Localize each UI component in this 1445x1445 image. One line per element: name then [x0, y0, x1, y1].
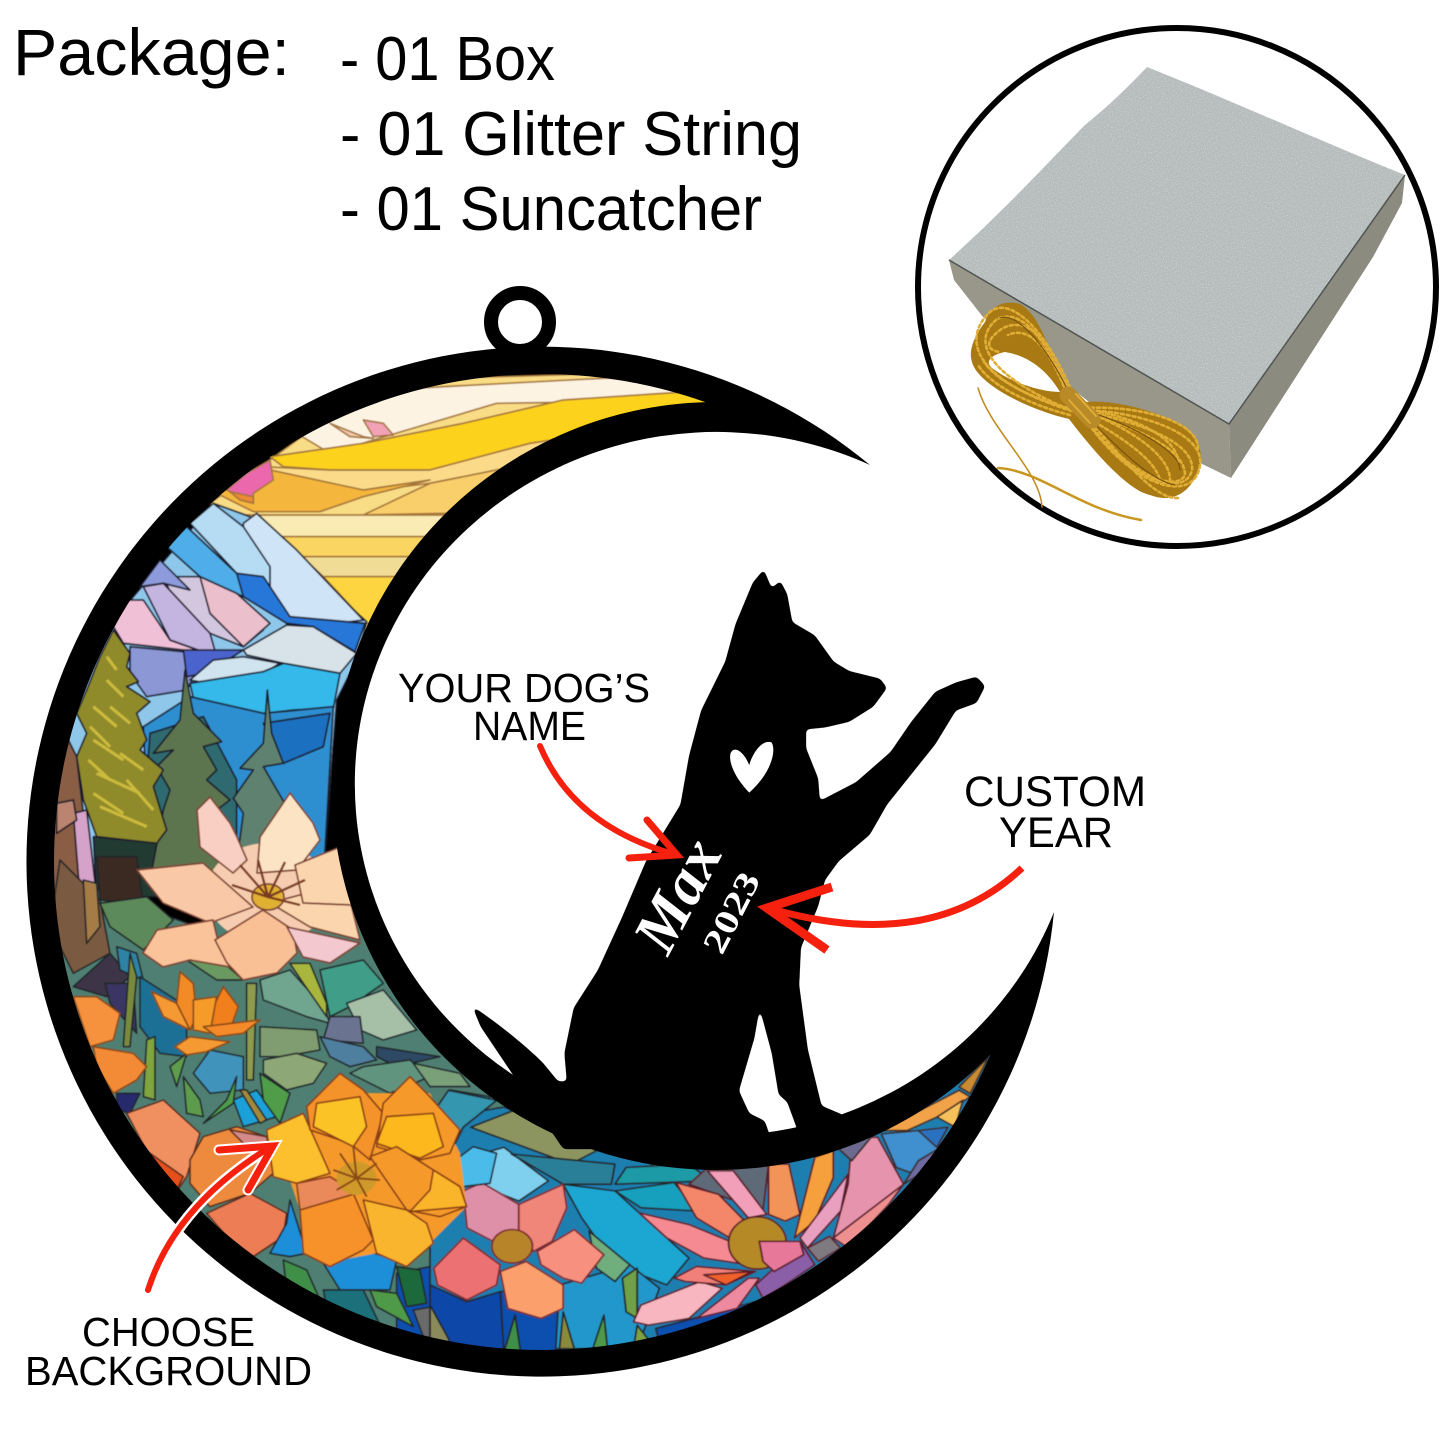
label: choose background: CHOOSE	[82, 1309, 255, 1355]
panel: moon suncatcher	[26, 293, 1054, 1386]
label: custom year: CUSTOM	[964, 768, 1146, 816]
glass: stems and leaves	[123, 953, 290, 1123]
package contents list	[340, 25, 802, 244]
glass: pale flower petals	[137, 793, 360, 980]
stained glass background	[30, 370, 1022, 1386]
label: choose background: BACKGROUND	[25, 1348, 312, 1394]
package contents list: - 01 Glitter String	[340, 100, 802, 169]
glass: third fir tree	[233, 690, 287, 863]
glass: yellow spruce	[77, 630, 167, 843]
hanging ring	[491, 293, 549, 351]
moon frame	[26, 347, 1054, 1377]
arrow: to background	[148, 1146, 273, 1290]
icon: white heart	[730, 742, 773, 793]
label: your dog's name: YOUR DOG’S	[398, 665, 650, 711]
glass: tulip group	[127, 1100, 287, 1257]
icon: glitter string	[971, 303, 1201, 520]
package contents list: - 01 Suncatcher	[340, 175, 762, 244]
package contents list: - 01 Box	[340, 25, 555, 94]
personalised year: 2023	[696, 866, 768, 960]
glass: mountains and trees	[30, 503, 367, 897]
glass: left brown panels	[54, 740, 158, 898]
glass: sky	[210, 370, 730, 633]
glass: big orange flower	[267, 1073, 497, 1267]
glass: dahlia	[634, 1137, 904, 1325]
glass: left orange poppies	[73, 997, 147, 1093]
icon: gift box	[949, 67, 1405, 478]
personalised name: Max	[620, 827, 736, 964]
glass: second fir tree	[150, 670, 230, 880]
heading: package: Package:	[13, 15, 290, 89]
label: your dog's name: NAME	[473, 703, 586, 749]
panel: box and string in circle	[918, 28, 1436, 546]
glass: blue patches	[268, 1198, 430, 1337]
glass: lower river, flowers	[428, 1054, 990, 1350]
glass: pink flower	[434, 1183, 604, 1318]
arrow: to name	[540, 746, 677, 858]
arrow: to year	[767, 868, 1022, 950]
label: custom year	[964, 768, 1146, 857]
label: choose background	[25, 1309, 312, 1394]
glass: right tip	[837, 1057, 989, 1184]
label: your dog's name	[398, 665, 650, 749]
glass: meadow background and stones	[54, 856, 506, 1337]
glass: small orange flower	[152, 972, 260, 1055]
label: custom year: YEAR	[999, 809, 1113, 857]
dog silhouette	[472, 569, 985, 1149]
